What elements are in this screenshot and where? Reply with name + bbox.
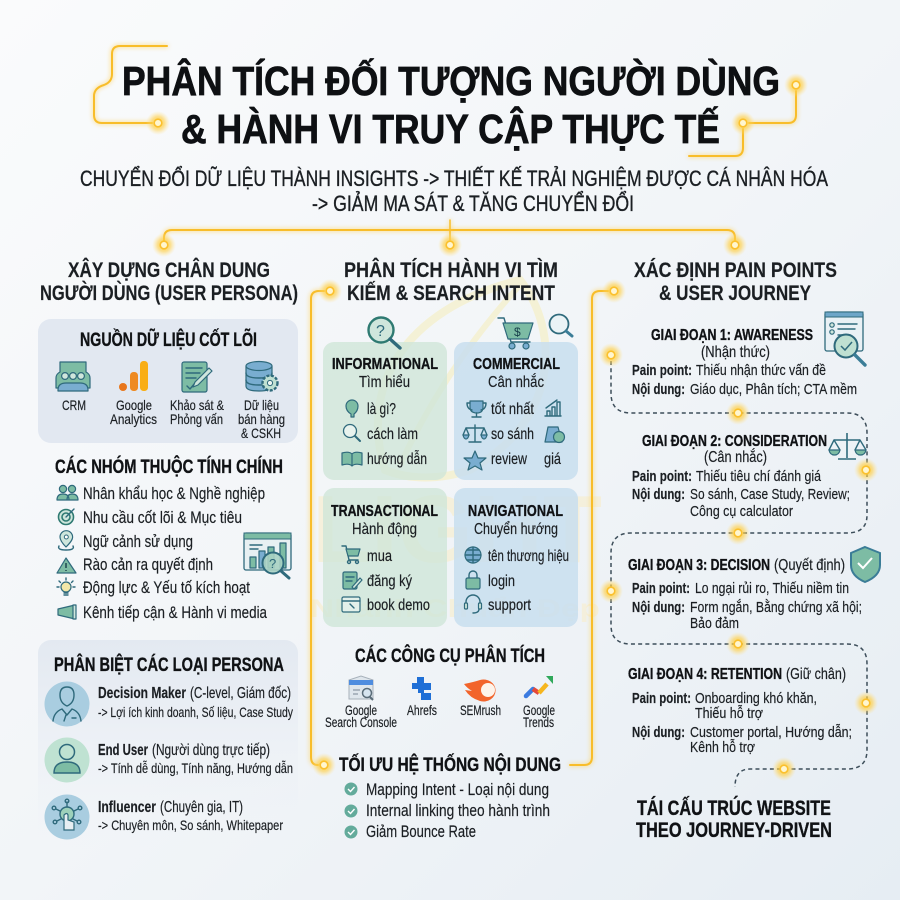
card heading: Cân nhắc bbox=[488, 372, 544, 391]
card heading: Hành động bbox=[352, 521, 417, 538]
panel: core data sources bbox=[38, 319, 298, 443]
card heading: NAVIGATIONAL bbox=[468, 503, 563, 520]
persona: end user: -> Tính dễ dùng, Tính năng, Hướng dẫn bbox=[98, 760, 293, 776]
stage 2: consideration: So sánh, Case Study, Review; bbox=[690, 486, 850, 503]
persona: influencer: -> Chuyên môn, So sánh, Whitepaper bbox=[98, 817, 283, 833]
stage 4: retention: Pain point: bbox=[632, 690, 691, 707]
panel heading: persona types: PHÂN BIỆT CÁC LOẠI PERSONA bbox=[54, 654, 284, 676]
watermark: LIGHT bbox=[312, 476, 602, 583]
label: Google Analytics bbox=[110, 397, 157, 427]
stage 4: retention: Thiếu hỗ trợ bbox=[695, 705, 763, 722]
title frame: right bracket bbox=[689, 73, 808, 156]
watermark bbox=[310, 280, 602, 623]
item: brand name: tên thương hiệu bbox=[488, 548, 569, 565]
stage 4: retention: Nội dung: bbox=[632, 724, 685, 741]
card: transactional bbox=[323, 488, 447, 627]
watermark: Nhanh Chuẩn Đẹp bbox=[310, 595, 600, 623]
item: buy: mua bbox=[367, 548, 392, 565]
block heading: TỐI ƯU HỆ THỐNG NỘI DUNG bbox=[339, 752, 561, 776]
block: main attribute groups bbox=[55, 456, 291, 622]
title: & HÀNH VI TRUY CẬP THỰC TẾ bbox=[181, 106, 720, 152]
stage 4: retention: Onboarding khó khăn, bbox=[695, 690, 817, 707]
stage 3: decision: Form ngắn, Bằng chứng xã hội; bbox=[690, 599, 862, 616]
heading: search intent: PHÂN TÍCH HÀNH VI TÌM bbox=[344, 258, 558, 282]
stage 1: awareness: Nội dung: bbox=[632, 381, 685, 398]
check item: bounce rate: Giảm Bounce Rate bbox=[366, 823, 476, 841]
stage 2: consideration: Pain point: bbox=[632, 468, 692, 485]
tool: ahrefs: Ahrefs bbox=[407, 703, 437, 718]
middle column frame right bbox=[570, 279, 626, 765]
connector to three columns bbox=[152, 220, 747, 257]
persona: decision maker: -> Lợi ích kinh doanh, Số liệu, Case Study bbox=[98, 704, 293, 720]
stage 1: awareness: (Nhận thức) bbox=[701, 344, 770, 361]
label: survey bbox=[170, 397, 225, 427]
card heading bbox=[332, 356, 438, 391]
label: sales data: bán hàng bbox=[238, 411, 285, 427]
card: commercial bbox=[454, 342, 578, 480]
middle column frame left bbox=[311, 279, 342, 777]
persona: end user bbox=[44, 738, 293, 782]
stage 3: decision: Pain point: bbox=[632, 580, 690, 597]
stage 1: awareness bbox=[632, 312, 865, 398]
item: compare: so sánh bbox=[491, 426, 534, 443]
persona: decision maker: Decision Maker bbox=[98, 685, 186, 702]
check item: mapping intent: Mapping Intent - Loại nội dung bbox=[366, 781, 549, 799]
item: guide: hướng dẫn bbox=[367, 451, 427, 468]
stage 1: awareness: GIAI ĐOẠN 1: AWARENESS bbox=[651, 327, 813, 344]
item: support: support bbox=[488, 597, 532, 614]
block heading: CÁC CÔNG CỤ PHÂN TÍCH bbox=[355, 645, 545, 667]
stage 3: decision: (Quyết định) bbox=[774, 557, 845, 574]
tool: semrush: SEMrush bbox=[460, 703, 501, 718]
title: PHÂN TÍCH ĐỐI TƯỢNG NGƯỜI DÙNG bbox=[122, 58, 780, 104]
heading: pain points: & USER JOURNEY bbox=[659, 282, 811, 305]
tool: ahrefs bbox=[407, 677, 437, 718]
journey dashed path bbox=[599, 343, 878, 787]
item: needs and goals: Nhu cầu cốt lõi & Mục tiêu bbox=[83, 508, 242, 527]
heading: user persona: XÂY DỰNG CHÂN DUNG bbox=[68, 258, 270, 282]
card heading: Tìm hiểu bbox=[359, 373, 410, 391]
heading: pain points bbox=[634, 259, 837, 305]
stage 2: consideration: Nội dung: bbox=[632, 486, 685, 503]
subtitle bbox=[80, 166, 828, 216]
persona: influencer bbox=[44, 794, 283, 840]
persona: influencer: Influencer bbox=[98, 799, 156, 816]
tool: google trends bbox=[523, 676, 555, 730]
icon: shield bbox=[851, 547, 880, 582]
card heading: Chuyển hướng bbox=[474, 520, 558, 538]
icon: question magnifier: ? bbox=[376, 323, 385, 340]
icon: question magnifier bbox=[368, 318, 400, 348]
tool: search console: Search Console bbox=[325, 715, 397, 730]
stage 3: decision bbox=[628, 547, 880, 632]
tool: google trends: Google bbox=[523, 703, 555, 718]
label: CRM: CRM bbox=[62, 397, 86, 413]
icon: survey bbox=[182, 362, 212, 392]
tool: search console bbox=[325, 676, 397, 730]
stage 1: awareness: Pain point: bbox=[632, 362, 692, 379]
icon: growth chart bbox=[545, 400, 561, 416]
stage 3: decision: Lo ngại rủi ro, Thiếu niềm tin bbox=[695, 580, 849, 597]
panel heading: core data sources: NGUỒN DỮ LIỆU CỐT LÕI bbox=[80, 329, 257, 351]
card heading: COMMERCIAL bbox=[473, 356, 560, 373]
icon: analytics window: ? bbox=[269, 556, 276, 571]
card heading: TRANSACTIONAL bbox=[331, 503, 438, 520]
label: sales data bbox=[238, 397, 285, 441]
stage 3: decision: GIAI ĐOẠN 3: DECISION bbox=[628, 557, 770, 574]
title frame: left bracket bbox=[94, 46, 170, 135]
label: sales data: Dữ liệu bbox=[244, 397, 279, 413]
card heading: INFORMATIONAL bbox=[332, 356, 438, 373]
icon: Google Analytics bbox=[119, 361, 148, 391]
heading: search intent bbox=[344, 258, 558, 305]
stage 3: decision: Nội dung: bbox=[632, 599, 685, 616]
stage 1: awareness: Giáo dục, Phân tích; CTA mềm bbox=[690, 381, 857, 398]
item: register: đăng ký bbox=[367, 573, 412, 590]
title bbox=[122, 58, 780, 152]
item: login: login bbox=[488, 573, 515, 590]
stage 2: consideration: (Cân nhắc) bbox=[704, 449, 767, 466]
icon: small magnifier bbox=[550, 314, 572, 336]
item: book demo: book demo bbox=[367, 597, 430, 614]
item: what is: là gì? bbox=[367, 401, 396, 418]
stage 2: consideration: Công cụ calculator bbox=[690, 503, 793, 520]
item: decision barriers bbox=[57, 555, 213, 574]
label: Google Analytics: Analytics bbox=[110, 411, 157, 427]
block: analysis tools bbox=[325, 645, 555, 730]
item: usage context bbox=[59, 531, 193, 551]
item: channels: Kênh tiếp cận & Hành vi media bbox=[83, 603, 267, 622]
heading: pain points: XÁC ĐỊNH PAIN POINTS bbox=[634, 259, 837, 282]
stage 2: consideration: GIAI ĐOẠN 2: CONSIDERATION bbox=[642, 433, 827, 450]
stage 1: awareness: Thiếu nhận thức vấn đề bbox=[696, 362, 826, 379]
persona: decision maker bbox=[44, 682, 293, 726]
item: how to: cách làm bbox=[367, 426, 418, 443]
label: sales data: & CSKH bbox=[241, 425, 281, 441]
stage 4: retention: Kênh hỗ trợ bbox=[690, 739, 755, 756]
tool: google trends: Trends bbox=[523, 715, 554, 730]
icon: analytics window bbox=[244, 533, 291, 578]
persona: end user: End User bbox=[98, 742, 148, 759]
item: usage context: Ngữ cảnh sử dụng bbox=[83, 532, 193, 551]
stage 4: retention: Customer portal, Hướng dẫn; bbox=[690, 724, 852, 741]
conclusion: THEO JOURNEY-DRIVEN bbox=[636, 819, 832, 842]
item: best: tốt nhất bbox=[491, 401, 535, 418]
icon: CRM bbox=[56, 362, 90, 391]
conclusion: TÁI CẤU TRÚC WEBSITE bbox=[637, 796, 831, 820]
tool: semrush bbox=[460, 680, 501, 718]
persona: decision maker: (C-level, Giám đốc) bbox=[190, 685, 291, 702]
tool: search console: Google bbox=[345, 703, 377, 718]
stage 2: consideration bbox=[632, 433, 866, 520]
label: survey: Phỏng vấn bbox=[170, 411, 223, 427]
panel: persona types bbox=[38, 640, 298, 850]
stage 4: retention bbox=[628, 666, 852, 756]
card heading bbox=[331, 503, 438, 538]
block heading: CÁC NHÓM THUỘC TÍNH CHÍNH bbox=[55, 456, 283, 478]
persona: influencer: (Chuyên gia, IT) bbox=[160, 799, 243, 816]
icon: scales bbox=[829, 433, 866, 459]
stage 2: consideration: Thiếu tiêu chí đánh giá bbox=[696, 468, 822, 485]
stage 4: retention: (Giữ chân) bbox=[786, 666, 846, 683]
heading: user persona bbox=[40, 258, 298, 305]
item: demographics: Nhân khẩu học & Nghề nghiệp bbox=[83, 484, 265, 503]
label: survey: Khảo sát & bbox=[170, 397, 225, 413]
subtitle: -> GIẢM MA SÁT & TĂNG CHUYỂN ĐỔI bbox=[312, 191, 634, 216]
stage 3: decision: Bảo đảm bbox=[690, 615, 739, 632]
icon: checklist magnifier bbox=[825, 312, 865, 365]
persona: end user: (Người dùng trực tiếp) bbox=[152, 742, 270, 759]
card: informational bbox=[323, 342, 447, 480]
heading: search intent: KIẾM & SEARCH INTENT bbox=[347, 282, 555, 305]
card heading bbox=[468, 503, 563, 538]
item: decision barriers: Rào cản ra quyết định bbox=[83, 555, 213, 574]
block: content system optimisation bbox=[339, 752, 561, 841]
icon: database bbox=[246, 362, 278, 391]
card: navigational bbox=[454, 488, 578, 627]
stage 4: retention: GIAI ĐOẠN 4: RETENTION bbox=[628, 666, 782, 683]
label: price: giá bbox=[544, 451, 561, 468]
check item: internal linking: Internal linking theo hành trình bbox=[366, 802, 550, 820]
icon: money bag bbox=[545, 427, 564, 442]
conclusion bbox=[636, 796, 832, 842]
check item: bounce rate bbox=[344, 823, 476, 841]
icon: shopping cart: $ bbox=[514, 325, 521, 339]
label: Google Analytics: Google bbox=[116, 397, 152, 413]
item: review: review bbox=[491, 451, 528, 468]
icon: shopping cart bbox=[498, 318, 533, 349]
card heading bbox=[473, 356, 560, 391]
item: motivation: Động lực & Yếu tố kích hoạt bbox=[83, 578, 250, 597]
heading: user persona: NGƯỜI DÙNG (USER PERSONA) bbox=[40, 281, 298, 305]
